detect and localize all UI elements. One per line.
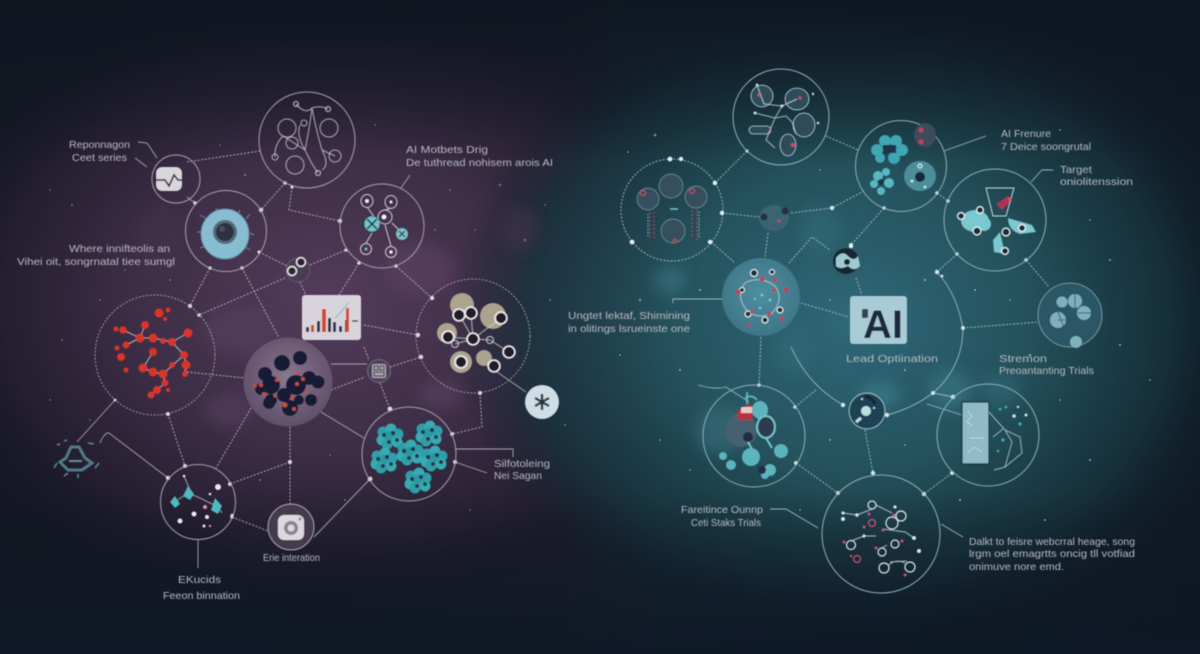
connector lines: teal network [673, 136, 1053, 537]
label: Reponnagon: Reponnagon [69, 139, 130, 151]
label: AI Frenure: 7 Deice soongrutal [1001, 141, 1091, 153]
circle: neural network [259, 92, 355, 188]
label: Dalkt description [969, 536, 1135, 573]
label: AI Frenure [1001, 128, 1091, 153]
connector lines: purple network [77, 142, 526, 568]
circle: pie segments [1038, 283, 1102, 348]
label: Dalkt description: lrgm oel emagrtts oncig tll votfiad [969, 548, 1135, 560]
icon: bar chart card [302, 295, 361, 340]
label: Dalkt description: onimuve nore emd. [969, 561, 1064, 573]
label: Erie interation: Erie interation [263, 552, 320, 564]
label: AI Motbets Drig: AI Motbets Drig [406, 144, 488, 156]
icon: AI card [850, 296, 907, 347]
label: Ungtet lektaf: Ungtet lektaf, Shimining [568, 310, 690, 322]
circle: cell [186, 190, 266, 272]
circle: phone [937, 384, 1039, 486]
icon: chip [368, 360, 390, 382]
icon: signal badge [152, 155, 200, 203]
label: Target: oniolitenssion [1060, 176, 1133, 188]
label: Target [1060, 164, 1133, 188]
label: Where innifteolis [17, 243, 175, 268]
label: Silfotoleing: Silfotoleing [494, 458, 550, 470]
icon: warning molecule [54, 440, 99, 478]
label: EKucids [163, 574, 240, 602]
label: Fareitince Ounnp: Fareitince Ounnp [681, 504, 763, 516]
circle: robot molecule [703, 385, 805, 487]
label: Lead Optiination: Lead Optiination [846, 353, 938, 365]
circle: teal clusters [362, 407, 456, 501]
circle: bottom molecule [822, 475, 940, 593]
icon: camera [268, 504, 314, 550]
circle: dotted cell pairs [621, 157, 724, 261]
dark blob node [828, 244, 864, 278]
icon: AI card: AI [863, 303, 903, 347]
label: Ungtet lektaf: in olitings lsrueinste one [568, 323, 690, 335]
label: EKucids: EKucids [178, 574, 221, 586]
label: Where innifteolis: Vihei oit, songrnatal tiee sumgl [17, 256, 175, 268]
small node [286, 258, 310, 282]
label: Stremon: Preoantanting Trials [999, 365, 1094, 377]
circle: teal cell [722, 258, 800, 336]
circle: protein network [733, 69, 829, 165]
circle: red molecule [95, 295, 215, 415]
small node blob [759, 205, 789, 231]
label: Silfotoleing [494, 458, 550, 482]
circle: small molecule [160, 464, 236, 540]
circle: beads [416, 279, 530, 393]
panel: teal network [568, 69, 1135, 593]
label: AI Motbets Drig [406, 144, 553, 169]
label: Dalkt description: Dalkt to feisre webcrral heage, song [969, 536, 1135, 548]
label: Target: Target [1060, 164, 1092, 176]
small node: magnifier [849, 393, 885, 429]
label: Reponnagon [69, 139, 130, 164]
label: Ungtet lektaf [568, 310, 690, 335]
panel: purple network [17, 92, 559, 602]
label: Stremon: Stremon [999, 353, 1047, 365]
label: Reponnagon: Ceet series [72, 152, 127, 164]
label: AI Frenure: AI Frenure [1001, 128, 1051, 140]
label: Fareitince Ounnp [681, 504, 763, 529]
label: EKucids: Feeon binnation [163, 590, 240, 602]
circle: molecular drug [340, 184, 424, 268]
circle: central dark cluster [244, 338, 332, 426]
label: Where innifteolis: Where innifteolis an [69, 243, 170, 255]
icon: asterisk badge [525, 385, 559, 419]
label: Fareitince Ounnp: Ceti Staks Trials [691, 517, 761, 529]
label: Stremon [999, 353, 1094, 377]
label: Silfotoleing: Nei Sagan [494, 470, 542, 482]
circle: target [944, 169, 1046, 271]
label: AI Motbets Drig: De tuthread nohisem arois AI [406, 157, 553, 169]
circle: protein complex [856, 120, 946, 212]
